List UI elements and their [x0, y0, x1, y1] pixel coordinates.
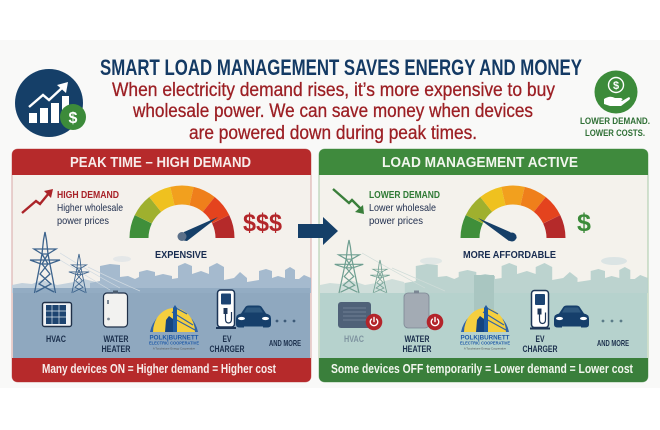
transmission towers: faded [335, 240, 445, 293]
device: HVAC [42, 302, 72, 345]
demand text: Lower wholesale [369, 202, 436, 214]
panel: peak time [12, 149, 311, 382]
arrow between panels [298, 217, 338, 245]
intro text: are powered down during peak times. [189, 122, 477, 144]
device: EV charger: CHARGER [210, 344, 245, 355]
cost symbol: high: $$$ [243, 209, 282, 237]
device: EV charger [210, 290, 271, 355]
panel header: load management: LOAD MANAGEMENT ACTIVE [382, 155, 578, 171]
device: EV charger: CHARGER [522, 344, 558, 355]
icon: falling demand arrow [333, 189, 364, 214]
icon: hand holding dollar with caption: $ [613, 80, 619, 92]
icon: rising demand arrow [22, 189, 53, 213]
intro text [112, 79, 555, 144]
device: EV charger: EV [536, 334, 545, 345]
demand text [369, 190, 440, 227]
device: water heater: WATER [104, 334, 129, 345]
device: EV charger: EV [222, 334, 232, 345]
panel: load management [319, 149, 648, 382]
demand text: power prices [57, 215, 109, 227]
cost symbol: low: $ [577, 209, 591, 237]
panel header: load management [319, 149, 648, 175]
gauge: more affordable [463, 195, 556, 261]
skyline: load management [320, 257, 648, 358]
panel header: peak time [12, 149, 311, 175]
intro text: wholesale power. We can save money when devices [132, 100, 533, 122]
gauge: expensive: EXPENSIVE [155, 249, 207, 261]
gauge: expensive [139, 195, 225, 261]
panel header: peak time: PEAK TIME – HIGH DEMAND [70, 155, 251, 171]
logo: Polk-Burnett [149, 305, 199, 350]
device off: water heater: WATER [404, 334, 430, 345]
more devices [597, 320, 629, 348]
device: HVAC: HVAC [46, 334, 66, 345]
footer: peak: Many devices ON = Higher demand = Higher cost [42, 362, 277, 376]
device off: HVAC: HVAC [344, 334, 364, 345]
footer: peak [12, 358, 311, 382]
footer: load management [319, 358, 648, 382]
more devices: AND MORE [269, 338, 301, 348]
logo: Polk-Burnett [460, 305, 510, 350]
demand text [57, 190, 123, 227]
icon: hand holding dollar with caption: LOWER COSTS. [585, 128, 645, 138]
more devices: AND MORE [597, 338, 629, 348]
transmission towers: peak [30, 232, 140, 293]
device: water heater: HEATER [102, 344, 131, 355]
demand text: Higher wholesale [57, 202, 123, 214]
device off: water heater [402, 290, 443, 355]
gauge: more affordable: MORE AFFORDABLE [463, 249, 556, 261]
more devices [269, 320, 301, 348]
skyline: peak [12, 256, 311, 358]
demand text: LOWER DEMAND [369, 190, 440, 201]
icon: rising chart with dollar badge: $ [69, 110, 78, 127]
device: water heater [102, 290, 131, 355]
device: EV charger [522, 290, 589, 355]
demand text: HIGH DEMAND [57, 190, 119, 201]
device off: water heater: HEATER [402, 344, 432, 355]
demand text: power prices [369, 215, 423, 227]
icon: hand holding dollar with caption [580, 70, 650, 138]
icon: rising chart with dollar badge [15, 69, 86, 137]
icon: hand holding dollar with caption: LOWER DEMAND. [580, 116, 650, 126]
device off: HVAC [338, 302, 382, 345]
intro text: When electricity demand rises, it’s more expensive to buy [112, 79, 555, 101]
